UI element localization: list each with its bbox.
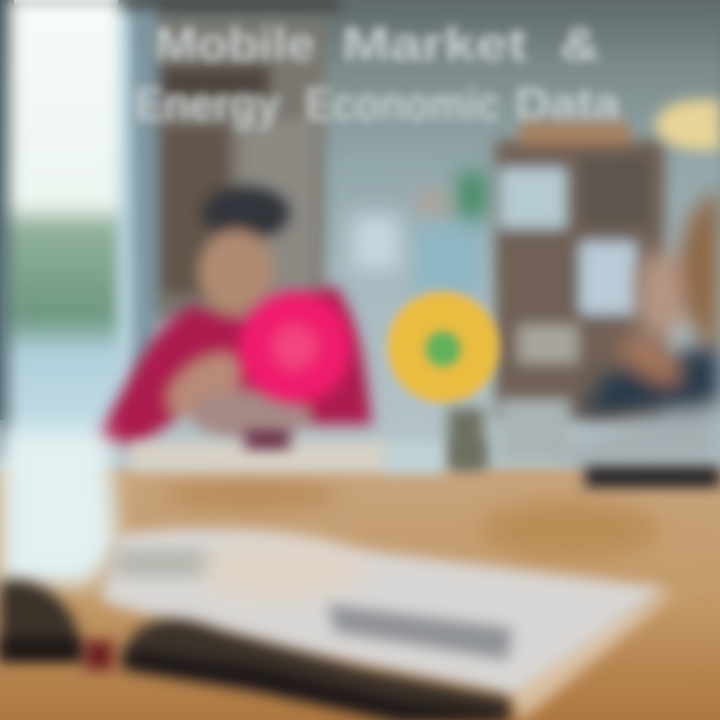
cover right xyxy=(122,619,510,720)
title text: Data xyxy=(515,78,620,130)
book edge xyxy=(495,590,680,720)
jeans xyxy=(555,405,720,470)
arm xyxy=(612,327,688,393)
lamp xyxy=(655,100,720,150)
window xyxy=(0,0,134,460)
right bookshelf xyxy=(495,122,665,460)
person: right xyxy=(555,190,720,470)
title text: Mobile xyxy=(155,18,315,70)
title text: Market xyxy=(342,18,527,70)
hair xyxy=(679,190,720,350)
left shelf and column xyxy=(120,0,340,410)
title text: Economic xyxy=(305,78,500,130)
background wall xyxy=(0,0,720,470)
wall panels xyxy=(352,172,486,300)
yellow circle icon xyxy=(387,291,499,403)
glare at lower left xyxy=(0,430,118,585)
face xyxy=(198,230,274,314)
open book xyxy=(0,529,680,720)
page blur text xyxy=(328,604,512,660)
cover left xyxy=(0,579,85,662)
cover left shadow xyxy=(0,638,80,660)
shirt xyxy=(95,285,372,445)
title text xyxy=(135,18,620,130)
forearms xyxy=(190,390,310,440)
cover right shadow xyxy=(125,650,505,720)
hair xyxy=(202,186,290,240)
table xyxy=(0,430,720,720)
pages xyxy=(100,529,668,695)
face xyxy=(636,250,684,340)
hands xyxy=(157,341,253,429)
spine xyxy=(85,640,113,670)
glass xyxy=(448,408,484,470)
title text: Energy xyxy=(135,78,280,130)
clothes xyxy=(580,345,720,415)
warm page tint xyxy=(195,540,365,600)
pink circle icon xyxy=(239,291,351,403)
upper left page marking xyxy=(115,552,205,574)
person: left xyxy=(95,186,372,445)
title text: & xyxy=(560,18,600,70)
